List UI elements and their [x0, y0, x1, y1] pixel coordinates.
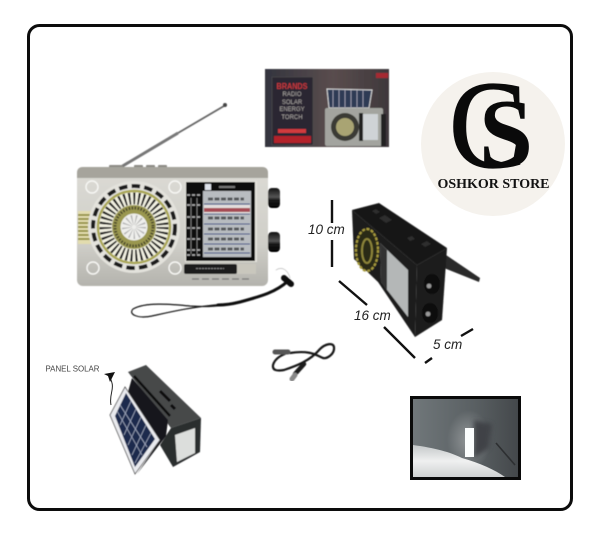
top controls: [372, 209, 431, 247]
store name: OSHKOR STORE: [438, 176, 550, 191]
device silhouette: [474, 420, 492, 458]
top buttons: [160, 391, 175, 409]
dimension: length line: [339, 281, 415, 358]
radio antenna base: [444, 255, 480, 282]
box title panel: RADIO: [282, 92, 302, 98]
box title panel: [272, 77, 313, 145]
front face: [352, 210, 417, 337]
light glow: [447, 410, 491, 470]
side knobs: [422, 274, 440, 323]
radio with solar panel: [110, 365, 201, 474]
panel hinge: [128, 378, 168, 474]
hinge groove: [134, 376, 170, 416]
solar panel: [110, 387, 160, 474]
top strip: [77, 167, 268, 178]
gold speaker: [356, 229, 378, 271]
top face: [352, 203, 447, 265]
panel solar label: PANEL SOLAR: [46, 364, 100, 374]
side face: [415, 248, 447, 337]
corner screws: [86, 181, 181, 274]
logo monogram: S: [479, 80, 533, 188]
arrow to panel: [104, 372, 115, 405]
telescopic antenna: [121, 103, 227, 167]
dimension: depth label: 5 cm: [433, 337, 462, 352]
box title panel: SOLAR: [282, 100, 303, 106]
box title panel: ENERGY: [279, 107, 305, 113]
box red badge: [376, 73, 388, 78]
USB cable: [273, 344, 334, 379]
room background: [413, 399, 518, 477]
black radio side view: [352, 203, 480, 337]
lantern light photo: [410, 396, 521, 480]
top buttons: [109, 165, 167, 168]
antenna shadow: [496, 443, 515, 465]
box title panel: BRANDS: [276, 82, 308, 91]
radio body: [77, 167, 268, 286]
silver radio product photo: [77, 103, 291, 317]
speaker core: [362, 239, 372, 263]
box radio image: [325, 89, 386, 146]
logo monogram: C: [449, 56, 527, 195]
dimension: depth line: [425, 329, 473, 363]
speaker: [88, 181, 180, 273]
logo badge circle: [421, 72, 565, 216]
radio top face: [128, 365, 201, 428]
gold grille: [78, 211, 104, 244]
display column: [380, 243, 387, 291]
tuning display: [185, 181, 257, 262]
dimension: height line: [331, 200, 333, 267]
radio front face: [160, 418, 201, 467]
wrist strap: [132, 268, 291, 317]
side display: [380, 243, 408, 317]
photo border: [410, 396, 521, 480]
lit floor: [413, 445, 505, 477]
frame repaint: [412, 398, 520, 478]
box title panel: TORCH: [281, 115, 303, 121]
tuner slider: [184, 264, 256, 279]
tuning knobs: [268, 188, 280, 252]
product box photo: [265, 69, 389, 147]
lamp light: [465, 428, 474, 457]
store logo: [421, 56, 565, 216]
dimension: length label: 16 cm: [354, 308, 391, 323]
lamp: [175, 428, 195, 462]
dimension: height label: 10 cm: [308, 222, 345, 237]
